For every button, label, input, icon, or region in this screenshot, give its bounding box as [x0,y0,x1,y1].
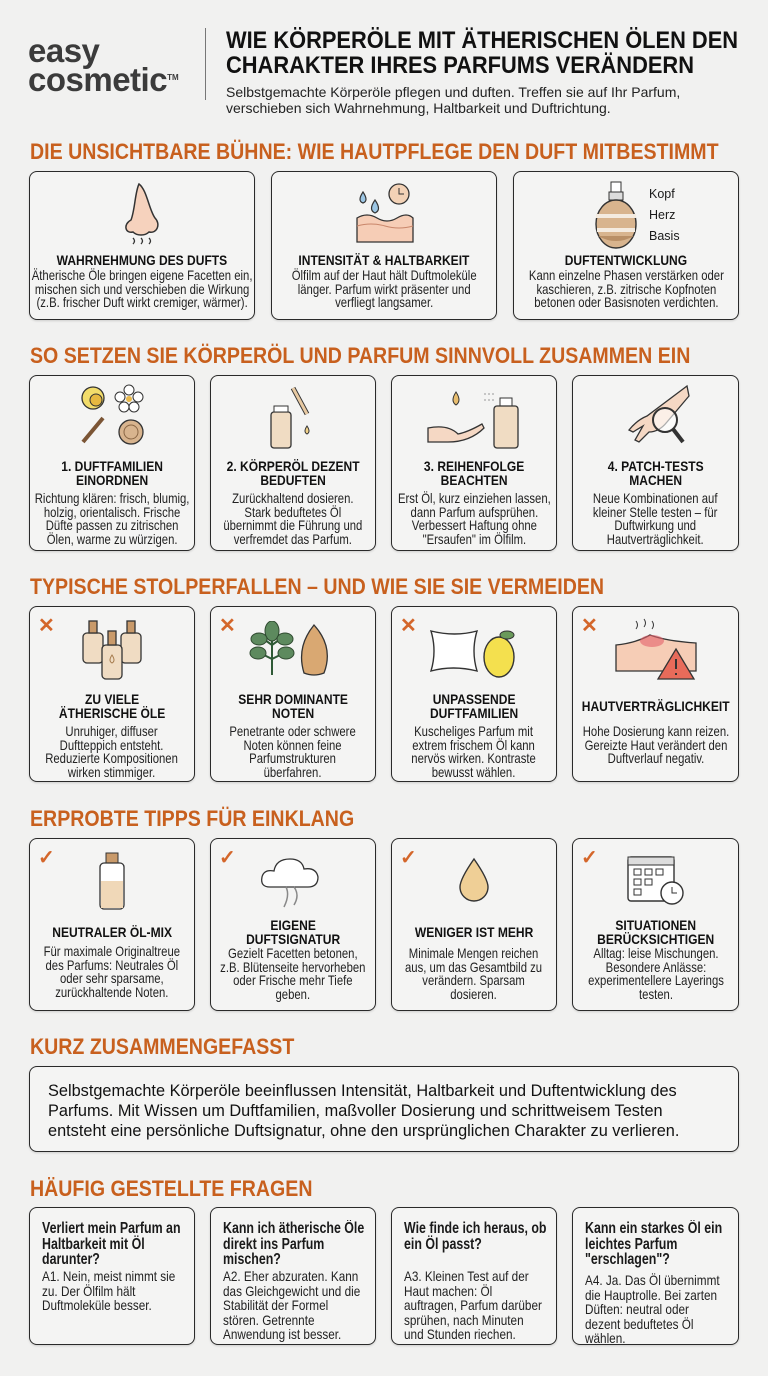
title: DUFTFAMILIEN [430,705,518,721]
icon: hand drop spray [427,391,519,449]
summary text: Selbstgemachte Körperöle beeinflussen Intensität, Haltbarkeit und Duftentwicklung des Parfums. Mit Wissen um Duftfamilien, maßvoller Dosierung und schrittweisem Testen entsteht eine persönliche Duftsignatur, ohne den ursprünglichen Charakter zu verlieren. [48,1081,679,1140]
heading: FAQ: HÄUFIG GESTELLTE FRAGEN [30,1176,312,1201]
title: 4. PATCH-TESTS [608,458,703,474]
answer: A2. Eher abzuraten. Kann das Gleichgewicht und die Stabilität der Formel stören. Getrennte Anwendung ist besser. [223,1268,360,1342]
icon: pillow and lemon [430,630,515,678]
title: 1. DUFTFAMILIEN [61,458,163,474]
labels: Kopf Herz Basis: Basis [649,229,680,243]
text: Richtung klären: frisch, blumig, holzig, orientalisch. Frische Düfte passen zu zitrischen Ölen, warme zu würzigen. [35,491,189,547]
text: Alltag: leise Mischungen. Besondere Anlässe: experimentellere Layerings testen. [588,946,723,1002]
icon: check: ✓ [581,847,598,869]
answer: A4. Ja. Das Öl übernimmt die Hauptrolle. Bei zarten Düften: neutral oder dezent beduftetes Öl wählen. [585,1272,720,1346]
title: WENIGER IST MEHR [415,924,533,940]
title: 2. KÖRPERÖL DEZENT [227,458,359,474]
logo: easy [28,32,99,69]
heading: section 1: DIE UNSICHTBARE BÜHNE: WIE HAUTPFLEGE DEN DUFT MITBESTIMMT [30,139,719,164]
title [227,458,360,488]
title [424,458,524,488]
text: Gezielt Facetten betonen, z.B. Blütenseite hervorheben oder Frische mehr Tiefe geben. [220,946,366,1002]
text: Zurückhaltend dosieren. Stark beduftetes Öl übernimmt die Führung und verfremdet das Parfum. [224,491,362,547]
panel: Duftentwicklung [513,171,739,320]
title: BERÜCKSICHTIGEN [597,931,714,947]
title: 3. REIHENFOLGE [424,458,524,474]
panel: Hautverträglichkeit [572,606,739,782]
question: Kann ich ätherische Öle direkt ins Parfum mischen? [223,1220,364,1268]
question: Kann ein starkes Öl ein leichtes Parfum "erschlagen"? [585,1220,722,1268]
icon: drop [459,858,489,902]
text: Neue Kombinationen auf kleiner Stelle testen – für Duftwirkung und Hautverträglichkeit. [593,491,718,547]
panel: Körperöl dezent [210,375,376,551]
title [430,691,518,721]
icon: cross: ✕ [38,615,55,637]
title: BEACHTEN [441,472,507,488]
icon: nose [125,182,159,244]
title [597,917,714,947]
answer: A1. Nein, meist nimmt sie zu. Der Ölfilm hält Duftmoleküle besser. [42,1268,175,1313]
panel: zu viele Öle [29,606,195,782]
panel: dominante Noten [210,606,376,782]
title: NEUTRALER ÖL-MIX [52,924,172,940]
icon: cross: ✕ [400,615,417,637]
summary box [29,1066,739,1152]
title: NOTEN [272,705,314,721]
text: Ätherische Öle bringen eigene Facetten ein, mischen sich und verschieben die Wirkung (z.B. frischer Duft wirkt cremiger, wärmer). [32,268,252,310]
text: Penetrante oder schwere Noten können feine Parfumstrukturen überfahren. [230,724,356,780]
labels: Kopf Herz Basis: Herz [649,208,675,222]
heading: section 2: SO SETZEN SIE KÖRPERÖL UND PARFUM SINNVOLL ZUSAMMEN EIN [30,343,690,368]
text: Ölfilm auf der Haut hält Duftmoleküle länger. Parfum wirkt präsenter und verfliegt langsamer. [292,268,476,310]
logo [28,32,179,98]
title: ÄTHERISCHE ÖLE [59,705,165,721]
title: EIGENE [270,917,316,933]
text: Kuscheliges Parfum mit extrem frischem Öl kann nervös wirken. Kontraste bewusst wählen. [412,724,536,780]
panel: unpassende Duftfamilien [391,606,557,782]
title: HAUTVERTRÄGLICHKEIT [582,698,729,714]
title: EINORDNEN [76,472,148,488]
title: INTENSITÄT & HALTBARKEIT [298,252,470,268]
question: Verliert mein Parfum an Haltbarkeit mit Öl darunter? [42,1220,181,1268]
heading: section 3: TYPISCHE STOLPERFALLEN – UND WIE SIE SIE VERMEIDEN [30,574,604,599]
answer: A3. Kleinen Test auf der Haut machen: Öl auftragen, Parfum darüber sprühen, nach Minuten und Stunden riechen. [404,1268,542,1342]
text: Unruhiger, diffuser Duftteppich entsteht. Reduzierte Kompositionen wirken stimmiger. [46,724,178,780]
text: Erst Öl, kurz einziehen lassen, dann Parfum aufsprühen. Verbessert Haftung ohne "Ersaufen" im Ölfilm. [398,491,550,547]
title [61,458,163,488]
faq 3 [391,1207,557,1345]
icon: cloud with swirl [261,858,319,908]
labels: Kopf Herz Basis [649,187,680,243]
icon: cross: ✕ [219,615,236,637]
panel: Patch-Tests [572,375,739,551]
divider [205,28,206,100]
title: DUFTENTWICKLUNG [565,252,687,268]
subtitle: Selbstgemachte Körperöle pflegen und duften. Treffen sie auf Ihr Parfum, [226,84,680,100]
faq 4 [572,1207,739,1345]
title [246,917,340,947]
icon: perfume bottle with layers [595,182,637,249]
title: BEDUFTEN [260,472,326,488]
subtitle: verschieben sich Wahrnehmung, Haltbarkeit und Duftrichtung. [226,100,611,116]
panel: Situationen [572,838,739,1011]
icon: three bottles [82,620,142,680]
title [238,691,348,721]
icon: calendar clock [627,856,684,905]
question: Wie finde ich heraus, ob ein Öl passt? [404,1220,547,1252]
subtitle [226,84,680,116]
title: UNPASSENDE [433,691,515,707]
title: WAHRNEHMUNG DES DUFTS [57,252,227,268]
faq 2 [210,1207,376,1345]
title: CHARAKTER IHRES PARFUMS VERÄNDERN [226,52,694,79]
panel: Duftfamilien [29,375,195,551]
icon: irritated skin warning [615,618,697,680]
title: SEHR DOMINANTE [238,691,348,707]
faq 1 [29,1207,195,1345]
icon: check: ✓ [38,847,55,869]
icon: lemon flower twig wood [81,384,144,445]
icon: check: ✓ [219,847,236,869]
icon: skin drops clock [356,183,414,243]
title: ZU VIELE [85,691,139,707]
panel: neutraler Öl-Mix [29,838,195,1011]
icon: bottle [99,852,125,910]
labels: Kopf Herz Basis: Kopf [649,187,675,201]
panel: Reihenfolge [391,375,557,551]
panel: Intensität [271,171,497,320]
heading: section 4: ERPROBTE TIPPS FÜR EINKLANG [30,806,354,831]
icon: arm with magnifier [628,384,690,444]
title: DUFTSIGNATUR [246,931,340,947]
text: Für maximale Originaltreue des Parfums: Neutrales Öl oder sehr sparsame, zurückhaltende Noten. [44,944,180,1000]
title [608,458,704,488]
icon: cross: ✕ [581,615,598,637]
icon: leaf and nut [250,621,328,676]
logo: cosmeticTM [28,61,179,98]
title [59,691,165,721]
title: SITUATIONEN [615,917,696,933]
heading: section 5: KURZ ZUSAMMENGEFASST [30,1034,294,1059]
panel: weniger ist mehr [391,838,557,1011]
panel: Wahrnehmung [29,171,255,320]
icon: check: ✓ [400,847,417,869]
title [226,27,738,79]
title: MACHEN [629,472,682,488]
text: Minimale Mengen reichen aus, um das Gesamtbild zu verändern. Sparsam dosieren. [405,946,543,1002]
title: WIE KÖRPERÖLE MIT ÄTHERISCHEN ÖLEN DEN [226,27,738,54]
text: Hohe Dosierung kann reizen. Gereizte Haut verändert den Duftverlauf negativ. [582,724,729,766]
text: Kann einzelne Phasen verstärken oder kaschieren, z.B. zitrische Kopfnoten betonen oder Basisnoten verdichten. [529,268,723,310]
icon: bottle dropper [270,386,310,449]
panel: eigene Duftsignatur [210,838,376,1011]
